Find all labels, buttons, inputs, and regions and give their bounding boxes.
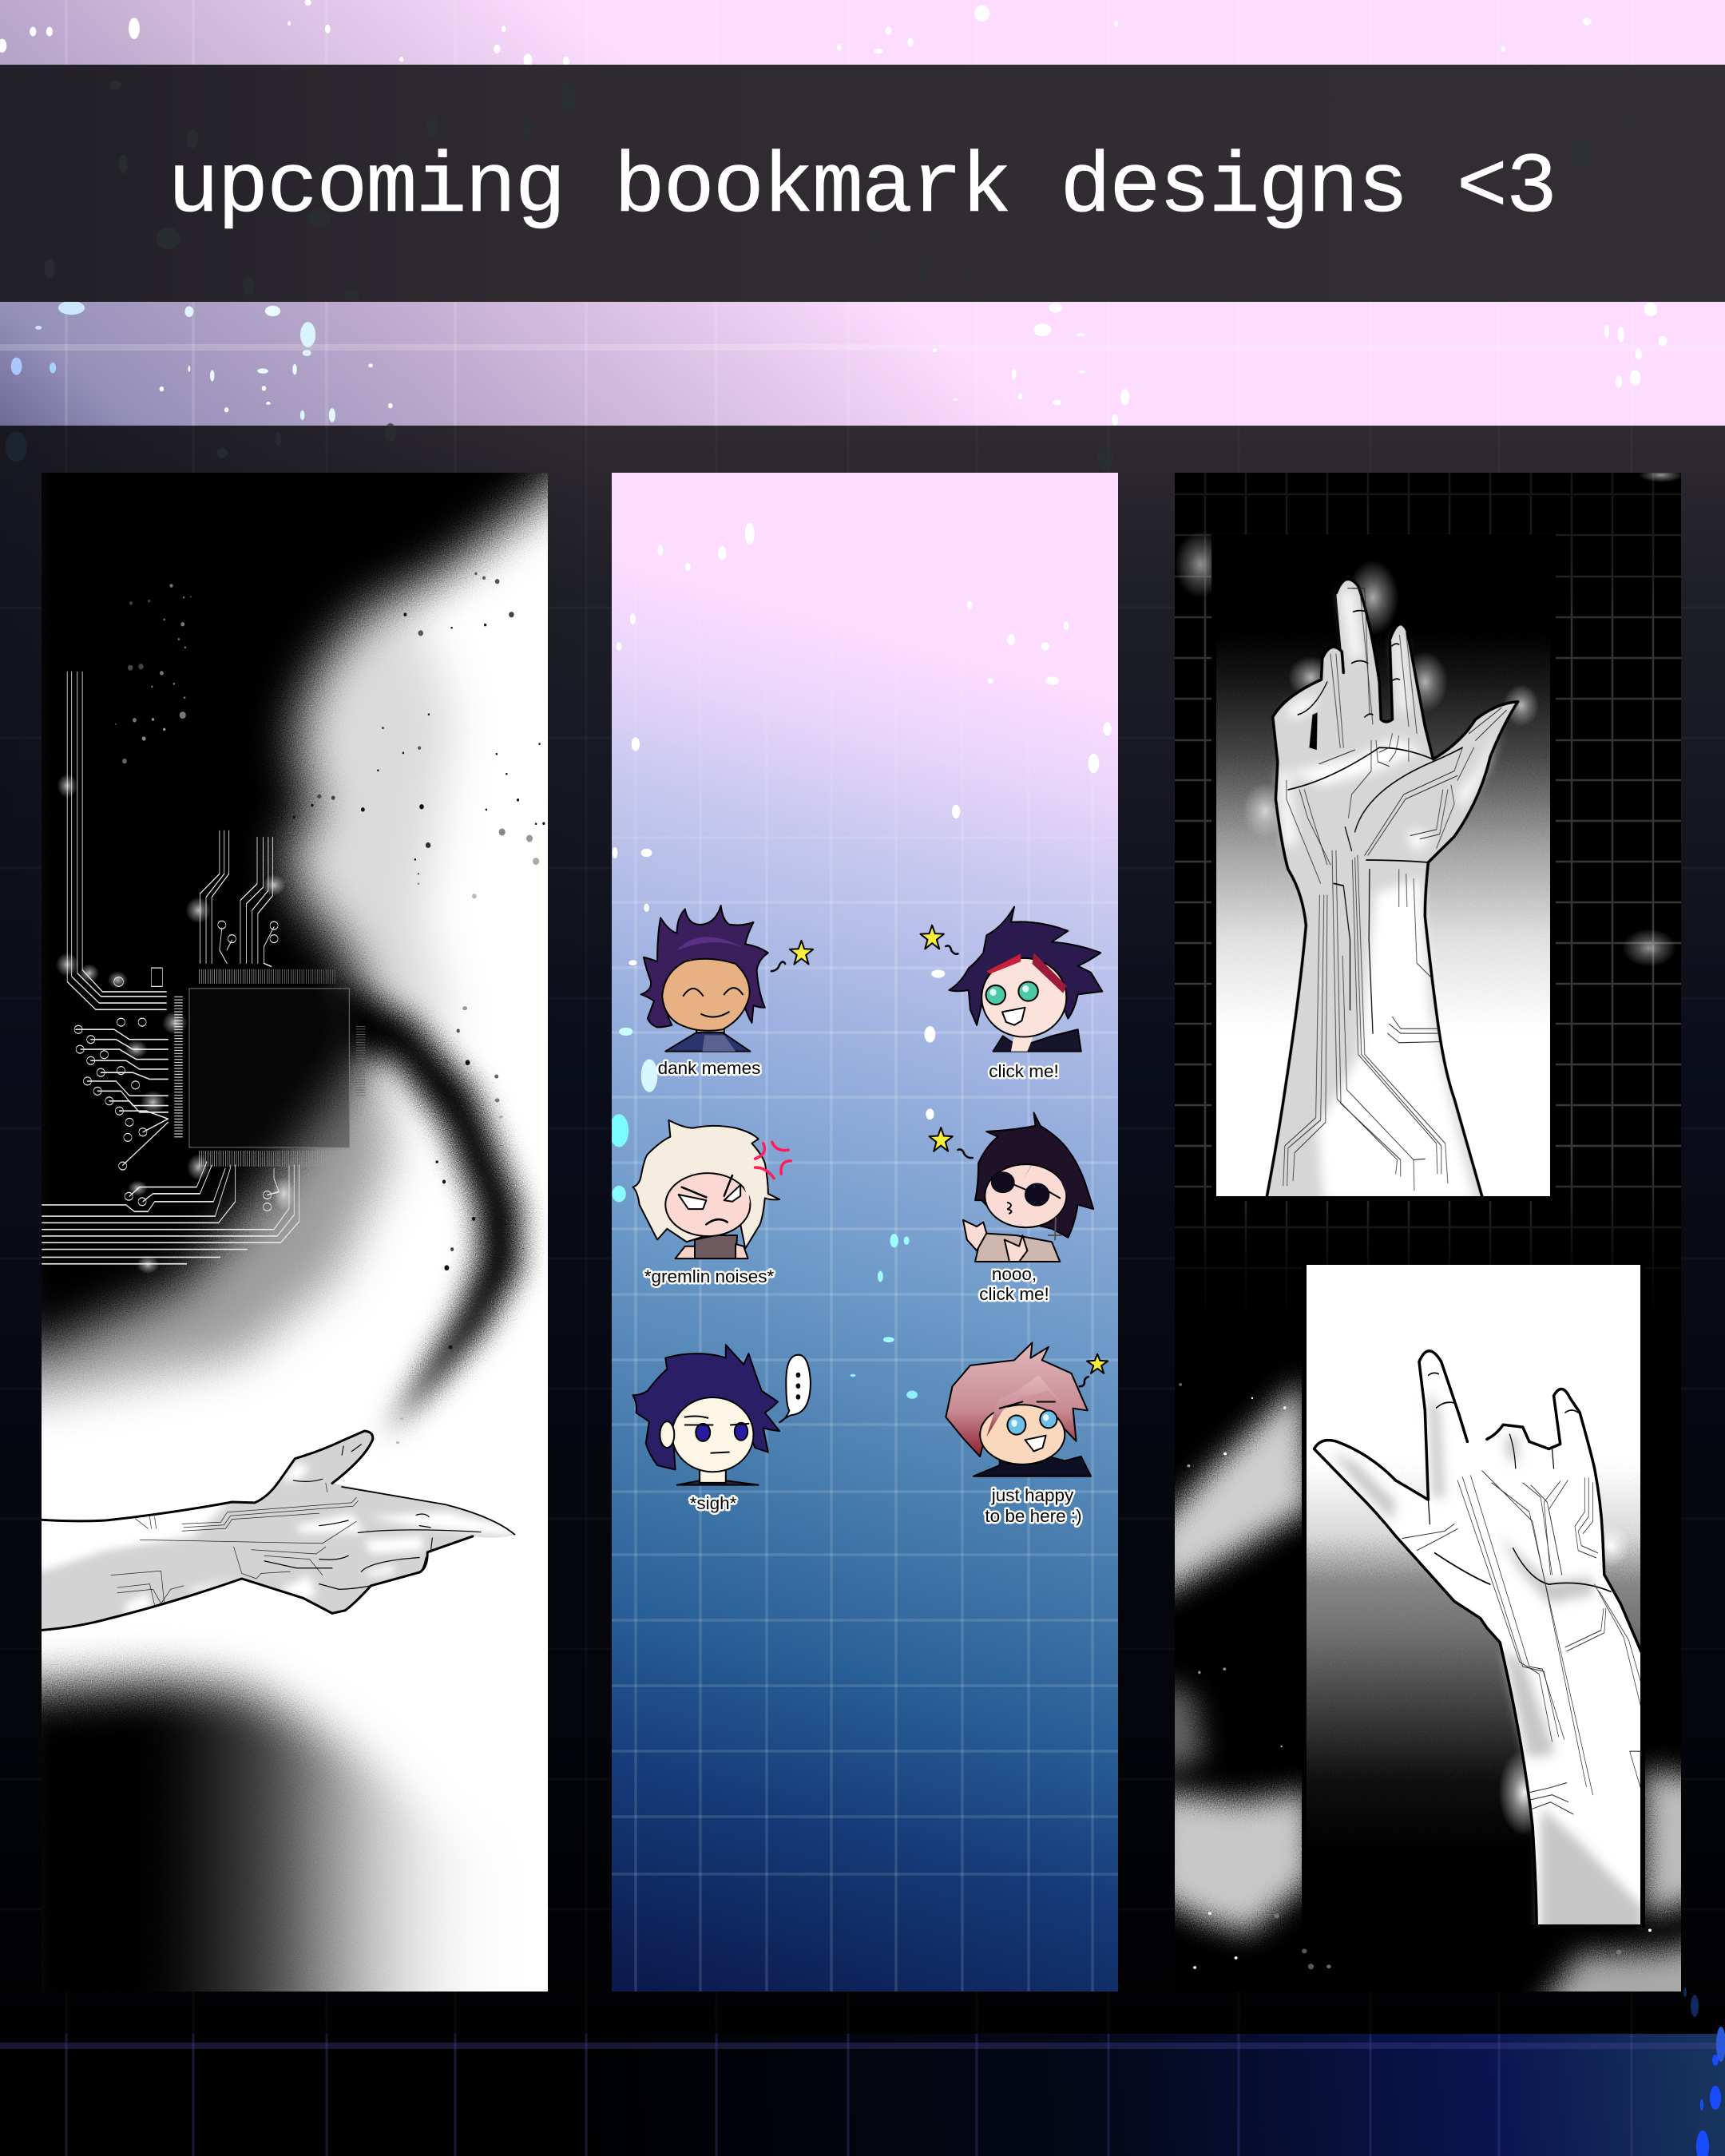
caption: sigh: *sigh* [690,1493,737,1513]
white petal flecks on top band [0,0,1668,426]
panel: circuit chip bookmark [42,473,548,1992]
panel: chibi character bookmark [609,473,1118,1992]
pointing hand [35,1431,516,1631]
panel grid [612,836,1118,1992]
smoke: lower left and right [1155,1381,1713,2028]
ink speckles near the dark wisp [396,1006,503,1444]
speckles [1179,1383,1652,1969]
chip pins [179,977,361,1159]
blue petals bottom right corner [1683,1988,1725,2156]
caption: click me!: click me! [989,1061,1059,1081]
ink speckles upper area [115,573,545,898]
hand: raised palm [1243,560,1539,1202]
caption: gremlin noises: *gremlin noises* [644,1266,775,1286]
caption: just happy to be here [985,1485,1082,1526]
caption: dank memes: dank memes [658,1058,760,1078]
caption: nooo, click me! [979,1264,1049,1304]
caption: nooo, click me!: nooo, [992,1264,1037,1284]
chibi: gremlin noises [632,1120,791,1258]
inner card: open hand [1182,503,1581,1230]
panel: circuit hands bookmark [1155,468,1713,2028]
caption: just happy to be here: to be here :) [985,1506,1082,1526]
inner card: rock-on hand [1270,1230,1669,1956]
chibi: click me [920,907,1102,1052]
chibi: nooo click me [930,1112,1093,1262]
caption: just happy to be here: just happy [991,1485,1074,1505]
dark petal flecks on title band [6,79,1632,470]
ink smoke [42,473,548,1992]
sparkle glows [1175,468,1683,967]
chibi: sigh [632,1345,811,1485]
glints [56,774,295,1274]
title: upcoming bookmark designs <3 [168,141,1557,237]
circuit traces [42,672,503,1444]
chibi: just happy [946,1342,1108,1476]
panel grid [1175,473,1681,1357]
hand: horns gesture [1315,1351,1644,1937]
caption: nooo, click me!: click me! [979,1284,1049,1304]
petals [609,523,1112,1399]
title band [0,65,1725,302]
chibi: dank memes [641,906,813,1052]
